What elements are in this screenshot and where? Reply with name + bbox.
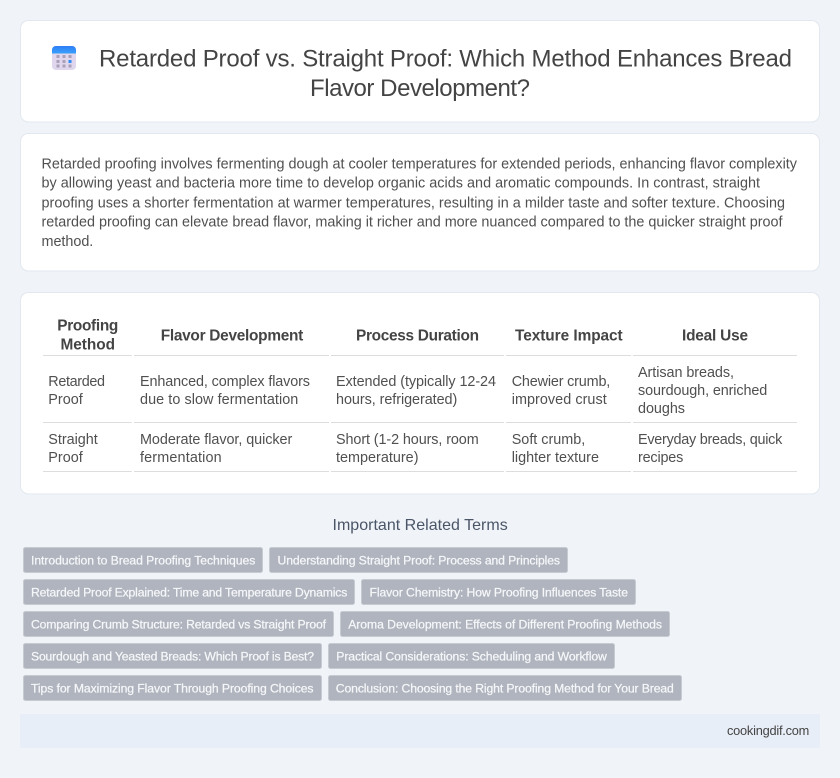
tag: [24, 612, 334, 636]
table row: retarded proof: Artisan breads,: [638, 365, 734, 381]
table row: retarded proof: hours, refrigerated): [336, 392, 457, 408]
table header row: [43, 318, 797, 356]
icon: calendar: [52, 46, 76, 70]
table row: retarded proof: Extended (typically 12-24: [336, 374, 496, 390]
text block: summary paragraph: method.: [42, 234, 93, 250]
table row: retarded proof: Enhanced, complex flavors: [140, 374, 310, 390]
tag: Sourdough and Yeasted Breads: Which Proof is Best?: [31, 649, 314, 663]
table row: straight proof: Proof: [48, 450, 84, 466]
panel: summary text: [20, 134, 820, 271]
table row: retarded proof: doughs: [638, 401, 685, 417]
table header row: Flavor Development: [161, 328, 303, 345]
table row: retarded proof: Retarded: [48, 374, 105, 390]
table row: straight proof: Moderate flavor, quicker: [140, 432, 293, 448]
tag: Tips for Maximizing Flavor Through Proofing Choices: [31, 681, 314, 695]
table row: retarded proof: sourdough, enriched: [638, 383, 767, 399]
tag: Understanding Straight Proof: Process and Principles: [278, 553, 560, 567]
tag: Aroma Development: Effects of Different Proofing Methods: [348, 617, 662, 631]
tag: [270, 548, 568, 572]
title: Retarded Proof vs. Straight Proof: Which Method Enhances Bread: [99, 46, 792, 73]
tag: Conclusion: Choosing the Right Proofing Method for Your Bread: [336, 681, 674, 695]
tag: [24, 676, 322, 700]
table row: retarded proof: due to slow fermentation: [140, 392, 298, 408]
text block: summary paragraph: retarded proofing can elevate bread flavor, making it richer and more nuanced compared to the quicker straight proof: [42, 215, 784, 231]
table row: retarded proof: improved crust: [512, 392, 607, 408]
tag: Retarded Proof Explained: Time and Temperature Dynamics: [31, 585, 347, 599]
tag: Flavor Chemistry: How Proofing Influences Taste: [370, 585, 628, 599]
table row: straight proof: temperature): [336, 450, 418, 466]
table row: retarded proof: Chewier crumb,: [512, 374, 610, 390]
tag: Practical Considerations: Scheduling and Workflow: [336, 649, 607, 663]
tag: [24, 548, 262, 572]
title: Flavor Development?: [310, 75, 530, 102]
table row: straight proof: Soft crumb,: [512, 432, 585, 448]
tag: Comparing Crumb Structure: Retarded vs Straight Proof: [31, 617, 327, 631]
table row: retarded proof: Proof: [48, 392, 84, 408]
table row: retarded proof: [43, 365, 797, 423]
table row: straight proof: Everyday breads, quick: [638, 432, 783, 448]
tag: [328, 644, 614, 668]
table row: straight proof: recipes: [638, 450, 683, 466]
tag: [328, 676, 682, 700]
panel: title card: [20, 20, 820, 122]
table header row: Ideal Use: [682, 328, 748, 345]
table row: straight proof: fermentation: [140, 450, 222, 466]
text block: summary paragraph: proofing uses a shorter fermentation at warmer temperatures, resulting in a milder taste and softer texture. Choosing: [42, 195, 785, 211]
text block: summary paragraph: by allowing yeast and bacteria more time to develop organic acids and aromatic compounds. In contrast, straight: [42, 176, 760, 192]
tag list: related terms: [24, 548, 682, 700]
table header row: Method: [60, 336, 115, 353]
table row: straight proof: [43, 432, 797, 472]
tag: [340, 612, 670, 636]
table header row: Texture Impact: [515, 328, 623, 345]
table row: straight proof: Short (1-2 hours, room: [336, 432, 479, 448]
heading: important related terms: Important Related Terms: [332, 517, 508, 534]
footer source text: cookingdif.com: [727, 723, 809, 738]
table header row: Process Duration: [356, 328, 479, 345]
tag: [24, 580, 354, 604]
panel: comparison table: [20, 292, 820, 494]
table row: straight proof: Straight: [48, 432, 98, 448]
footer bar: [20, 714, 820, 748]
text block: summary paragraph: [42, 156, 798, 250]
tag: [362, 580, 636, 604]
title: [99, 46, 792, 102]
table header row: Proofing: [57, 318, 118, 335]
text block: summary paragraph: Retarded proofing involves fermenting dough at cooler temperatures for extended periods, enhancing flavor complexity: [42, 156, 798, 172]
tag: [24, 644, 322, 668]
tag: Introduction to Bread Proofing Techniques: [31, 553, 255, 567]
table row: straight proof: lighter texture: [512, 450, 599, 466]
